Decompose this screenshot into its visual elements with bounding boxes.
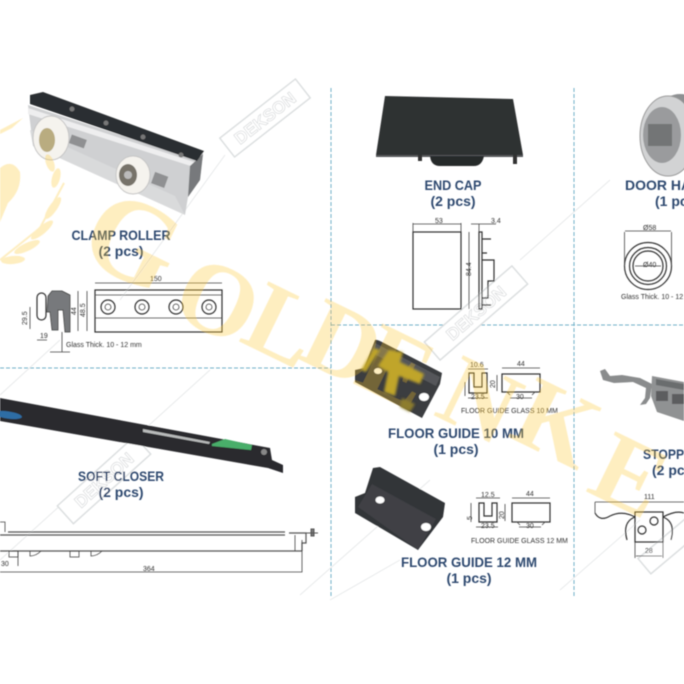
watermark: golden key lettering [0, 118, 684, 541]
quantity: floor guide 10 mm: (1 pcs) [433, 441, 479, 457]
soft closer technical drawing [0, 522, 318, 573]
floor guide 10 mm product photo [355, 340, 442, 418]
clamp roller product photo [28, 92, 204, 215]
panel: stopper [595, 369, 684, 558]
door handle product photo [640, 94, 684, 176]
heading: soft closer: SOFT CLOSER [78, 468, 164, 484]
door handle technical drawing: Ø40 [643, 262, 656, 269]
faint diagonal lines [0, 155, 640, 600]
floor guide 12 mm product photo [355, 467, 445, 550]
panel: end cap [376, 96, 523, 309]
floor guide 10 mm technical drawing: 23.5 [471, 394, 485, 401]
end cap technical drawing: 84.4 [466, 262, 473, 276]
panel: clamp roller [22, 92, 222, 352]
watermark: golden key lettering: K [496, 355, 617, 492]
stopper product photo [600, 369, 684, 421]
floor guide 12 mm technical drawing: 5 [467, 516, 474, 520]
panel: door handle [621, 94, 684, 301]
floor guide 10 mm technical drawing: 10.6 [470, 362, 484, 369]
stopper technical drawing: 111 [644, 494, 655, 501]
watermark: golden key lettering: G [63, 162, 203, 320]
dekson watermark stamps: DEKSON [231, 89, 300, 148]
clamp roller technical drawing: 48.5 [80, 303, 87, 317]
watermark: golden key lettering: N [422, 334, 538, 467]
dekson watermark stamps [57, 79, 684, 574]
floor guide 12 mm technical drawing: 44 [526, 491, 534, 498]
floor guide 12 mm technical drawing [467, 491, 568, 545]
door handle technical drawing [621, 225, 684, 301]
quantity: soft closer: (2 pcs) [98, 484, 144, 500]
heading: floor guide 10 mm: FLOOR GUIDE 10 MM [388, 425, 524, 441]
quantity: clamp roller: (2 pcs) [98, 243, 144, 259]
main content group [0, 79, 684, 600]
clamp roller technical drawing: 19 [40, 333, 48, 340]
door handle technical drawing: Ø58 [643, 225, 656, 232]
clamp roller technical drawing: Glass Thick. 10 - 12 mm [66, 342, 142, 349]
soft closer technical drawing: 30 [1, 561, 9, 568]
quantity: floor guide 12 mm: (1 pcs) [446, 570, 492, 586]
end cap technical drawing: 53 [435, 218, 443, 225]
panel: floor guide 12 mm [355, 467, 568, 586]
floor guide 12 mm technical drawing: 30 [526, 523, 534, 530]
soft closer product photo [0, 398, 283, 473]
end cap technical drawing: 3.4 [491, 218, 501, 225]
panel: soft closer [0, 398, 318, 573]
watermark tint over floor guide [361, 348, 424, 412]
floor guide 12 mm technical drawing: 20 [499, 511, 506, 519]
dekson watermark stamps: DEKSON [443, 282, 510, 344]
end cap technical drawing [413, 218, 501, 309]
floor guide 12 mm technical drawing: FLOOR GUIDE GLASS 12 MM [471, 538, 568, 545]
watermark: golden key lettering: E [341, 302, 452, 433]
heading: clamp roller: CLAMP ROLLER [72, 227, 170, 243]
watermark: laurel wreath and keyhole [0, 118, 64, 265]
stopper technical drawing [595, 494, 684, 558]
floor guide 12 mm technical drawing: 23.5 [481, 523, 495, 530]
floor guide 10 mm technical drawing: 20 [490, 380, 497, 388]
floor guide 10 mm technical drawing: FLOOR GUIDE GLASS 10 MM [461, 408, 558, 415]
clamp roller technical drawing: 150 [150, 276, 162, 283]
clamp roller technical drawing: 29.5 [22, 311, 29, 325]
clamp roller technical drawing: 44 [71, 307, 78, 315]
watermark: golden key lettering: E [574, 410, 684, 541]
end cap product photo [376, 96, 523, 166]
roller wheel right [116, 156, 150, 194]
watermark: golden key lettering: L [227, 260, 338, 391]
heading: floor guide 12 mm: FLOOR GUIDE 12 MM [401, 554, 537, 570]
watermark: golden key lettering: O [157, 232, 278, 369]
floor guide 10 mm technical drawing: 44 [517, 361, 525, 368]
stopper technical drawing: 28 [645, 548, 653, 555]
roller wheel left [33, 116, 69, 160]
panel: floor guide 10 mm [355, 340, 558, 457]
floor guide 10 mm technical drawing: 30 [516, 394, 524, 401]
watermark: golden key lettering: D [285, 277, 401, 410]
floor guide 12 mm technical drawing: 12.5 [481, 492, 495, 499]
soft closer technical drawing: 364 [143, 566, 155, 573]
quantity: end cap: (2 pcs) [430, 193, 476, 209]
dekson watermark stamps: DEKSON [71, 449, 138, 512]
panel dividers [0, 88, 684, 597]
heading: end cap: END CAP [424, 177, 482, 193]
floor guide 10 mm technical drawing [461, 361, 558, 415]
clamp roller technical drawing [22, 276, 222, 352]
